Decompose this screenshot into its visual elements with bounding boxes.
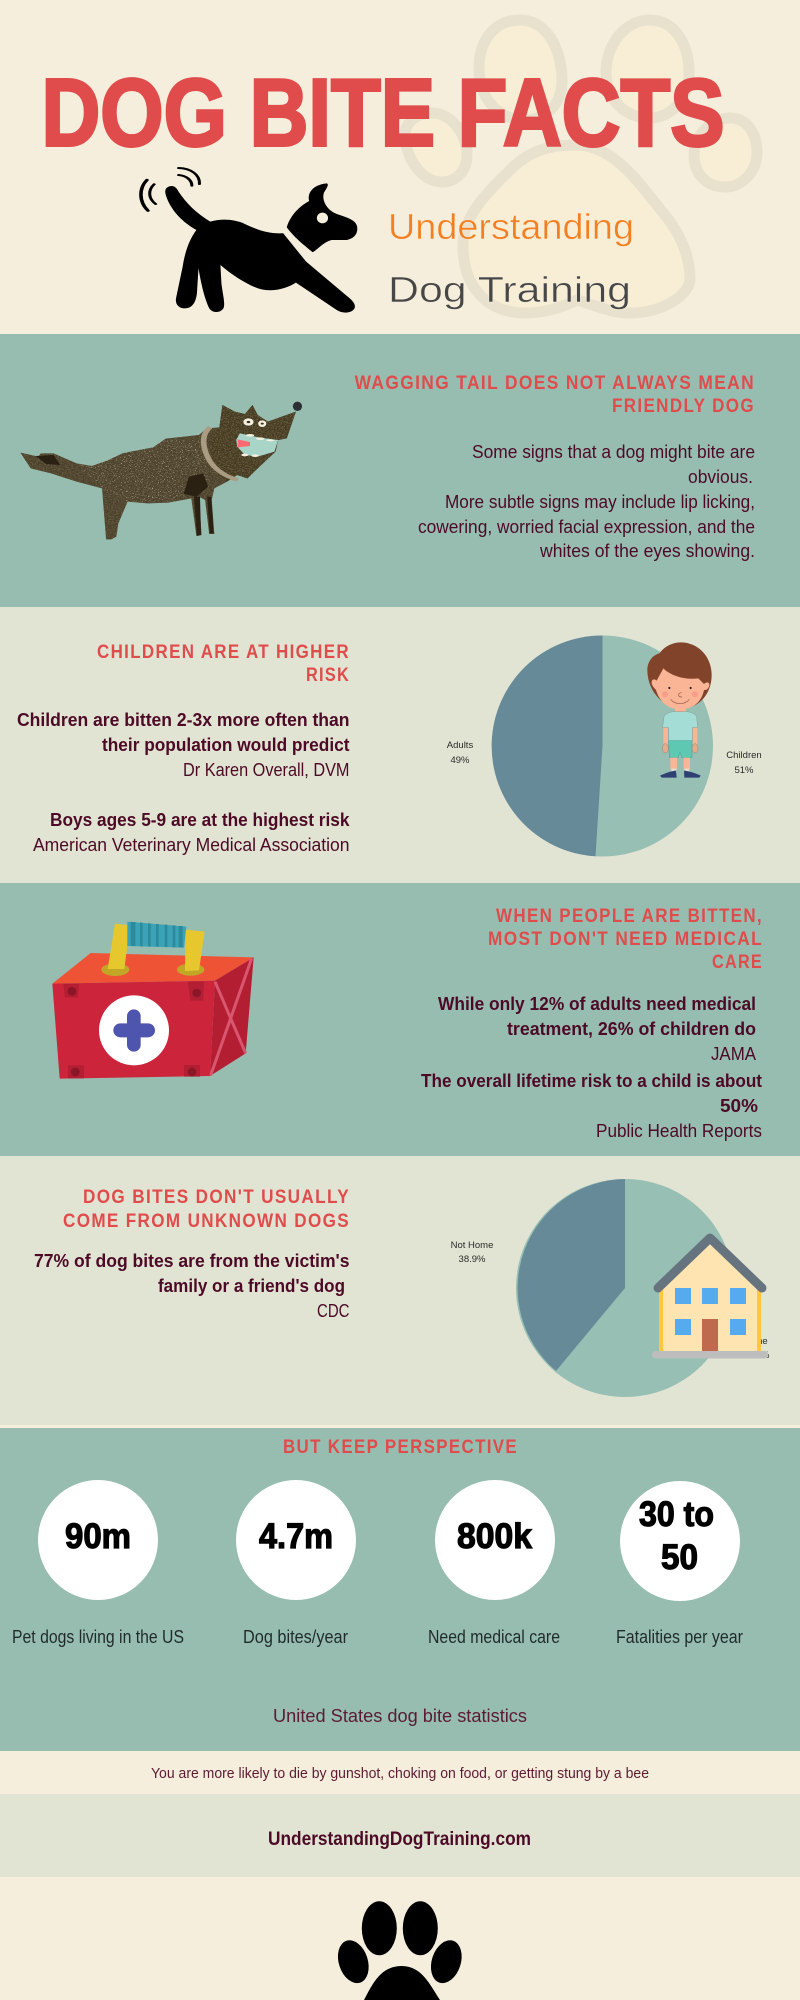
panel: medical care — [0, 883, 800, 1156]
heading: MOST DON'T NEED MEDICAL — [488, 929, 763, 950]
text block: subtle signs: Some signs that a dog might bite are — [472, 441, 755, 462]
icon: wagging black dog — [141, 168, 357, 313]
text block: subtle signs: More subtle signs may include lip licking, — [445, 491, 755, 512]
icon: black paw print — [333, 1901, 467, 2000]
stat: fatalities: 30 to — [639, 1495, 714, 1534]
heading: CHILDREN ARE AT HIGHER — [97, 642, 350, 663]
heading: COME FROM UNKNOWN DOGS — [63, 1211, 350, 1232]
pie chart: home vs not home: Not Home — [451, 1240, 493, 1251]
text block: medical treatment statistic: While only 12% of adults need medical — [438, 994, 756, 1014]
panel: comparison note — [0, 1751, 800, 1794]
stat: pet dogs: Pet dogs living in the US — [12, 1627, 184, 1647]
text block: medical treatment statistic — [438, 994, 757, 1064]
pie chart: children vs adults: 49% — [450, 755, 470, 766]
text block: subtle signs — [418, 441, 755, 561]
pie chart: children vs adults: Adults — [447, 740, 473, 751]
heading: RISK — [306, 665, 350, 686]
stat: fatalities: Fatalities per year — [616, 1627, 743, 1647]
logo text: Understanding: Understanding — [388, 206, 634, 247]
illustration: house — [652, 1238, 768, 1358]
illustration: first aid kit — [52, 922, 254, 1079]
stat: dog bites — [236, 1480, 356, 1647]
stat: medical care — [428, 1480, 560, 1647]
pie chart: home vs not home: Home — [742, 1336, 768, 1347]
text block: medical treatment statistic: JAMA — [711, 1043, 757, 1064]
panel: comparison note: You are more likely to die by gunshot, choking on food, or getting stung by a bee — [151, 1765, 649, 1782]
panel: header — [0, 0, 800, 334]
stat: pet dogs — [12, 1480, 184, 1647]
logo text: Dog Training: Dog Training — [388, 269, 631, 310]
heading: DOG BITES DON'T USUALLY — [83, 1187, 350, 1208]
text block: boys statistic: Boys ages 5-9 are at the highest risk — [50, 810, 350, 830]
text block: boys statistic — [33, 810, 350, 855]
text block: boys statistic: American Veterinary Medical Association — [33, 834, 350, 855]
heading — [355, 373, 755, 417]
text block: lifetime risk statistic: Public Health Reports — [596, 1120, 762, 1141]
panel: website — [0, 1794, 800, 1877]
panel: keep perspective — [0, 1428, 800, 1751]
pie chart: home vs not home — [451, 1179, 770, 1397]
text block: children statistic: their population would predict — [102, 735, 350, 755]
heading: WHEN PEOPLE ARE BITTEN, — [496, 906, 763, 927]
panel: children at higher risk — [0, 607, 800, 883]
pie chart: home vs not home: 38.9% — [459, 1254, 486, 1265]
stat: dog bites: Dog bites/year — [243, 1627, 348, 1647]
text block: subtle signs: whites of the eyes showing. — [539, 540, 755, 561]
heading: WAGGING TAIL DOES NOT ALWAYS MEAN — [355, 373, 755, 394]
icon: background paw print — [405, 20, 757, 313]
text block: lifetime risk statistic — [421, 1071, 762, 1141]
heading: CARE — [712, 952, 763, 973]
stat: dog bites: 4.7m — [259, 1517, 333, 1556]
panel: footer — [0, 1877, 800, 2000]
stat: medical care: 800k — [457, 1517, 533, 1556]
stat: medical care: Need medical care — [428, 1627, 560, 1647]
illustration: smiling boy — [647, 642, 712, 778]
panel: website: UnderstandingDogTraining.com — [268, 1829, 531, 1850]
heading — [63, 1187, 350, 1232]
panel: unknown dogs — [0, 1156, 800, 1428]
text block: children statistic — [17, 710, 350, 780]
text block: family dogs statistic — [34, 1251, 350, 1321]
text block: family dogs statistic: family or a friend's dog — [158, 1276, 345, 1296]
text block: medical treatment statistic: treatment, 26% of children do — [507, 1019, 756, 1039]
text block: family dogs statistic: CDC — [317, 1300, 350, 1321]
panel: wagging tail — [0, 334, 800, 607]
text block: children statistic: Dr Karen Overall, DVM — [183, 759, 350, 780]
pie chart: children vs adults: Children — [726, 750, 762, 761]
text block: family dogs statistic: 77% of dog bites are from the victim's — [34, 1251, 350, 1271]
text block: lifetime risk statistic: 50% — [720, 1096, 758, 1116]
text block: subtle signs: cowering, worried facial expression, and the — [418, 516, 755, 537]
heading — [488, 906, 763, 973]
stat: pet dogs: 90m — [65, 1517, 131, 1556]
illustration: snarling wolf dog — [20, 402, 302, 539]
heading: FRIENDLY DOG — [612, 396, 755, 417]
stat: fatalities: 50 — [661, 1538, 698, 1577]
caption: statistics: United States dog bite statistics — [273, 1705, 527, 1726]
pie chart: home vs not home: 61.1% — [743, 1350, 770, 1361]
text block: children statistic: Children are bitten 2-3x more often than — [17, 710, 350, 730]
text block: lifetime risk statistic: The overall lifetime risk to a child is about — [421, 1071, 762, 1091]
pie chart: children vs adults: 51% — [734, 765, 754, 776]
pie chart: children vs adults — [447, 635, 762, 856]
stat: fatalities — [616, 1481, 743, 1647]
heading: BUT KEEP PERSPECTIVE — [283, 1437, 518, 1458]
heading — [97, 642, 350, 686]
text block: subtle signs: obvious. — [688, 466, 753, 487]
